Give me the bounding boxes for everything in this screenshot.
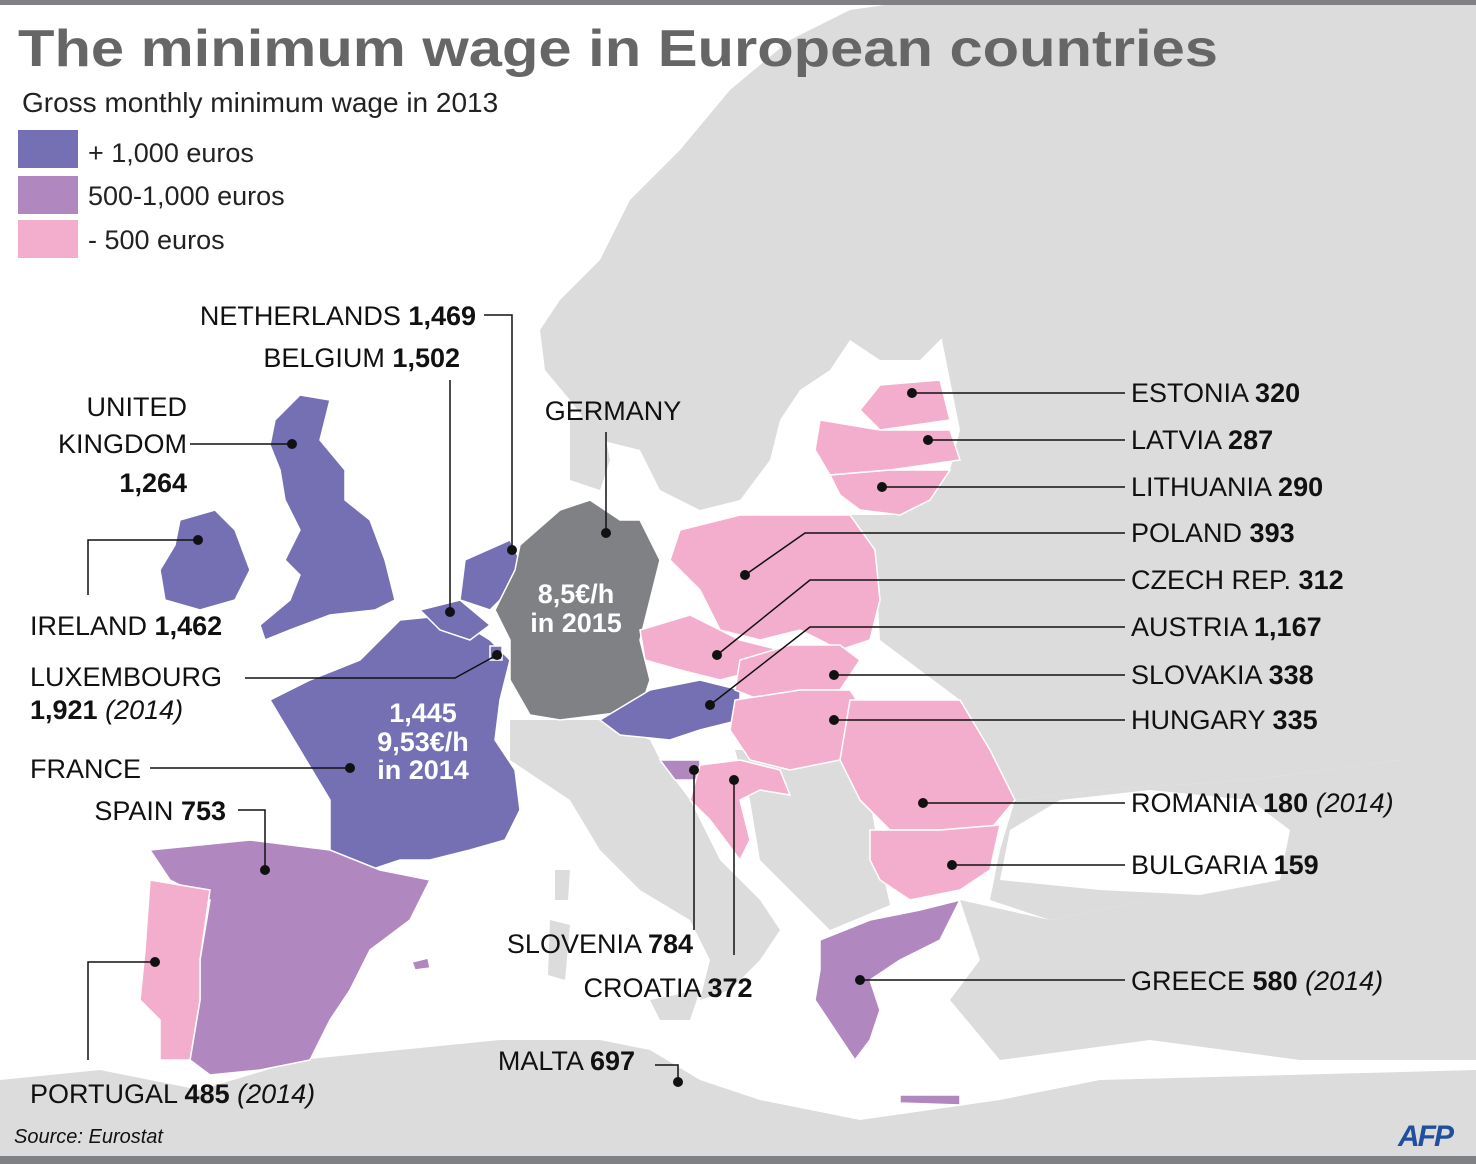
country labels left: PORTUGAL 485 (2014) <box>30 1079 315 1109</box>
country labels left: NETHERLANDS 1,469 <box>200 301 476 331</box>
legend: + 1,000 euros <box>88 138 254 168</box>
country labels right: ESTONIA 320 <box>1131 378 1300 408</box>
frame lines <box>0 0 1476 5</box>
title: The minimum wage in European countries <box>18 20 1218 78</box>
country labels right: POLAND 393 <box>1131 518 1295 548</box>
country labels right: HUNGARY 335 <box>1131 705 1318 735</box>
country labels left: CROATIA 372 <box>583 973 753 1003</box>
Black Sea <box>1000 790 1290 895</box>
in-map labels: in 2015 <box>530 608 622 638</box>
legend: 500-1,000 euros <box>88 181 285 211</box>
country labels left <box>30 301 753 1109</box>
country labels right: CZECH REP. 312 <box>1131 565 1344 595</box>
legend <box>18 130 285 258</box>
in-map labels: 1,445 <box>389 698 457 728</box>
country labels left: FRANCE <box>30 754 141 784</box>
source: Source: Eurostat <box>14 1126 164 1148</box>
country labels left: MALTA 697 <box>498 1046 635 1076</box>
in-map labels: in 2014 <box>377 755 469 785</box>
country labels right: BULGARIA 159 <box>1131 850 1319 880</box>
leader lines and dots <box>88 315 1125 1080</box>
country labels left: GERMANY <box>545 396 681 426</box>
country labels left: IRELAND 1,462 <box>30 611 222 641</box>
country labels right <box>1131 378 1394 996</box>
in-map labels <box>377 579 622 785</box>
country labels left: SLOVENIA 784 <box>507 929 693 959</box>
country labels right: SLOVAKIA 338 <box>1131 660 1314 690</box>
country labels left: KINGDOM <box>58 429 187 459</box>
country labels right: ROMANIA 180 (2014) <box>1131 788 1394 818</box>
country labels left: LUXEMBOURG <box>30 662 222 692</box>
country labels right: LATVIA 287 <box>1131 425 1273 455</box>
in-map labels: 9,53€/h <box>377 727 469 757</box>
country labels left: 1,921 (2014) <box>30 695 183 725</box>
map countries <box>140 380 1015 1105</box>
country labels left: BELGIUM 1,502 <box>263 343 460 373</box>
country labels left: 1,264 <box>119 468 187 498</box>
country labels left: SPAIN 753 <box>94 796 226 826</box>
subtitle: Gross monthly minimum wage in 2013 <box>22 87 498 118</box>
country labels right: GREECE 580 (2014) <box>1131 966 1383 996</box>
country labels left: UNITED <box>86 392 187 422</box>
country labels right: LITHUANIA 290 <box>1131 472 1323 502</box>
in-map labels: 8,5€/h <box>538 579 614 609</box>
country labels right: AUSTRIA 1,167 <box>1131 612 1322 642</box>
logo: AFP: AFP <box>1397 1120 1455 1153</box>
legend: - 500 euros <box>88 225 225 255</box>
